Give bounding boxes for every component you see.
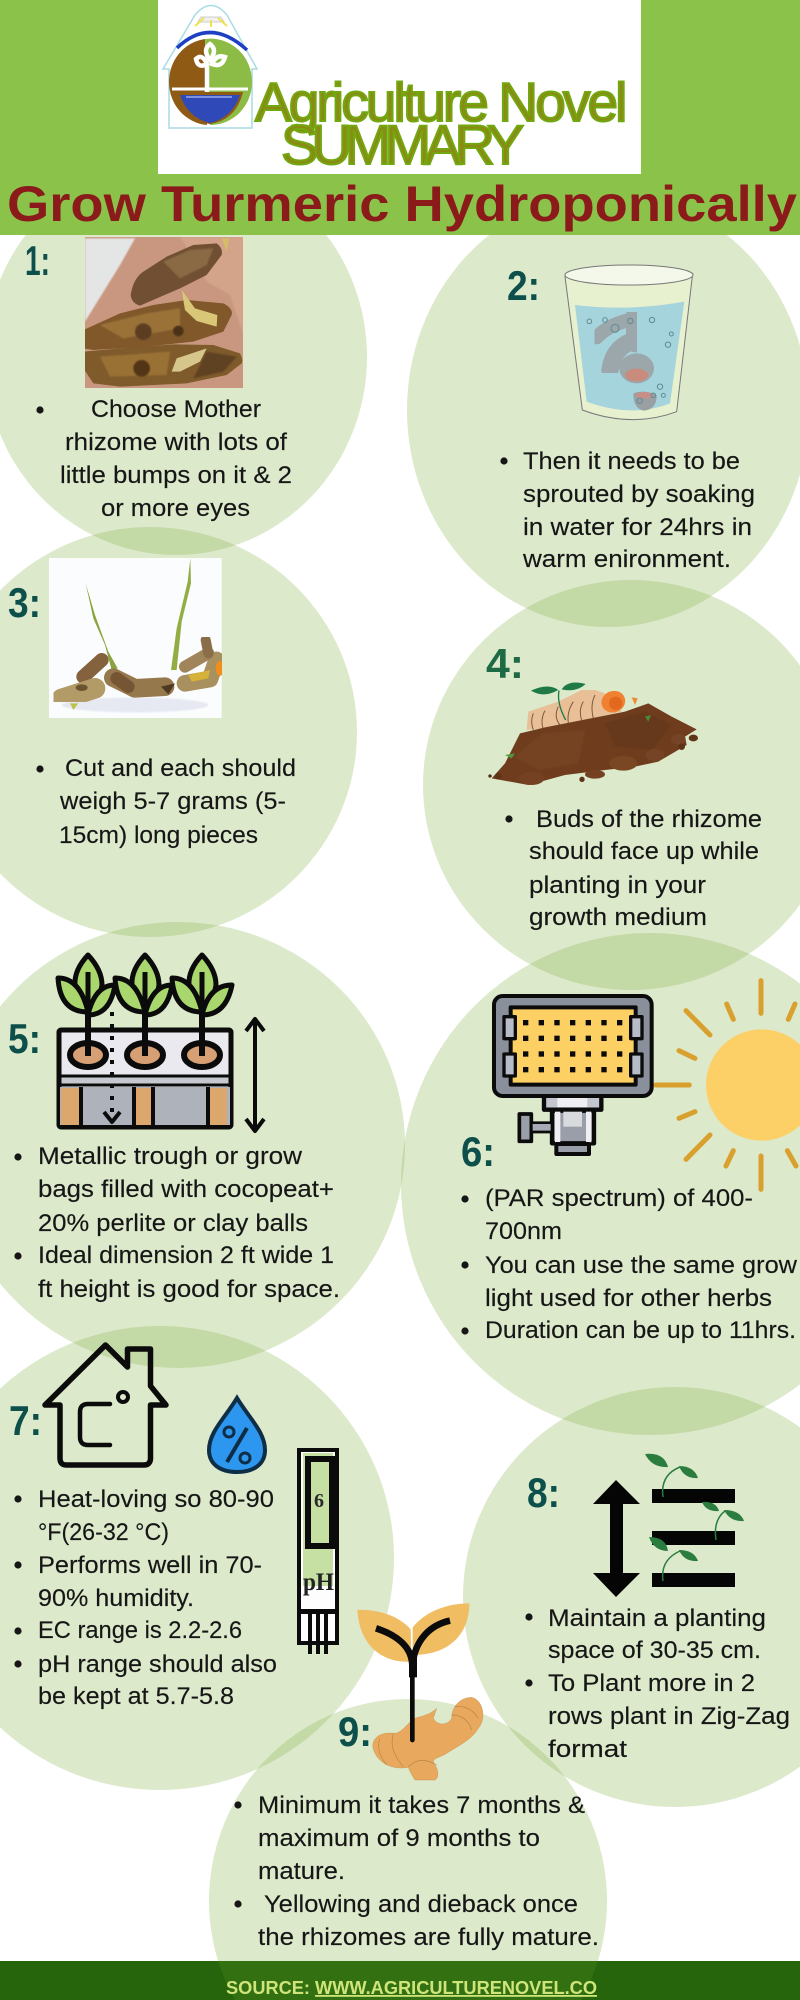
heading: 9: 9:: [338, 1708, 372, 1755]
text: step 5 instructions: bags filled with cocopeat+: [38, 1176, 334, 1203]
icon: pH test strip: 6: [314, 1490, 324, 1512]
text: step 2 instruction: sprouted by soaking: [523, 481, 755, 508]
icon: pH test strip: pH: [303, 1569, 335, 1596]
icon: LED grow light: [494, 996, 652, 1154]
text: step 2 instruction: warm enironment.: [522, 546, 731, 573]
text: step 7 instructions: be kept at 5.7-5.8: [38, 1683, 234, 1710]
text: step 8 instructions: To Plant more in 2: [548, 1670, 755, 1697]
text: step 5 instructions: 20% perlite or clay balls: [38, 1210, 308, 1237]
text: step 8 instructions: format: [548, 1736, 627, 1763]
icon: rhizome planted in soil: [488, 683, 698, 785]
icon: grow trough with three plants: [58, 955, 264, 1131]
text: step 3 instruction: weigh 5-7 grams (5-: [59, 788, 286, 815]
heading: 6: 6:: [461, 1128, 495, 1175]
text: step 3 instruction: Cut and each should: [65, 755, 296, 782]
panel: step 4: [423, 580, 800, 990]
text: step 5 instructions: ft height is good for space.: [38, 1276, 340, 1303]
logo panel: [158, 0, 641, 176]
text: step 1 instruction: rhizome with lots of: [65, 429, 287, 456]
heading: 2: 2:: [507, 262, 540, 309]
heading: 8: 8:: [527, 1469, 560, 1516]
panel: step 9: [209, 1603, 607, 1961]
text: step 7 instructions: EC range is 2.2-2.6: [38, 1617, 242, 1644]
title: Grow Turmeric Hydroponically: [7, 176, 797, 232]
heading: 4: 4:: [486, 640, 524, 687]
footer: source bar: SOURCE: WWW.AGRICULTURENOVEL.CO: [226, 1978, 597, 1998]
text: step 7 instructions: °F(26-32 °C): [38, 1519, 169, 1546]
icon: sun: [656, 981, 800, 1189]
text: step 8 instructions: space of 30-35 cm.: [548, 1637, 761, 1664]
text: step 9 instructions: Minimum it takes 7 months &: [258, 1792, 585, 1819]
text: step 7 instructions: [14, 1486, 277, 1710]
text: step 2 instruction: Then it needs to be: [523, 448, 740, 475]
text: step 1 instruction: or more eyes: [101, 495, 250, 522]
text: step 5 instructions: Metallic trough or grow: [38, 1143, 303, 1170]
text: step 9 instructions: Yellowing and dieback once: [264, 1891, 578, 1918]
text: step 1 instruction: little bumps on it & 2: [60, 462, 292, 489]
heading: 5: 5:: [8, 1015, 41, 1062]
text: step 9 instructions: mature.: [258, 1858, 345, 1885]
panel: step 1: [0, 235, 367, 555]
text: step 7 instructions: Heat-loving so 80-90: [38, 1486, 274, 1513]
text: step 4 instruction: [505, 806, 762, 931]
panel: step 5: [0, 922, 405, 1368]
icon: planting space arrow and rows: [593, 1454, 744, 1597]
icon: turmeric seedling: [357, 1603, 483, 1780]
icon: greenhouse logo: [163, 6, 257, 128]
text: step 8 instructions: Maintain a planting: [548, 1605, 766, 1632]
text: step 7 instructions: Performs well in 70-: [38, 1552, 262, 1579]
text: step 8 instructions: [525, 1605, 790, 1763]
panel: step 3: [0, 527, 357, 937]
text: step 6 instructions: Duration can be up to 11hrs.: [485, 1317, 796, 1344]
panel: step 2: [407, 193, 800, 627]
photo: sprouted turmeric pieces: [49, 558, 224, 718]
text: step 2 instruction: in water for 24hrs in: [523, 514, 752, 541]
text: step 6 instructions: light used for other herbs: [485, 1285, 772, 1312]
panel: step 6: [401, 933, 800, 1435]
text: step 6 instructions: [461, 1185, 798, 1344]
panel: step 7: [0, 1326, 394, 1790]
icon: pH test strip: [297, 1450, 338, 1654]
text: step 7 instructions: 90% humidity.: [38, 1585, 194, 1612]
heading: 7: 7:: [9, 1397, 42, 1444]
header: green banner: [0, 0, 800, 235]
text: step 3 instruction: 15cm) long pieces: [59, 822, 258, 849]
icon: house with temperature: [45, 1345, 166, 1465]
heading: 1: 1:: [25, 237, 50, 284]
text: step 4 instruction: should face up while: [529, 838, 759, 865]
text: step 8 instructions: rows plant in Zig-Zag: [548, 1703, 790, 1730]
logo text: [255, 71, 624, 176]
icon: humidity drop: [209, 1398, 265, 1472]
text: step 5 instructions: [14, 1143, 340, 1303]
text: step 1 instruction: Choose Mother: [91, 396, 261, 423]
text: step 6 instructions: You can use the same grow: [485, 1252, 798, 1279]
text: step 1 instruction: [36, 396, 292, 522]
text: step 6 instructions: 700nm: [485, 1218, 562, 1245]
text: step 2 instruction: [500, 448, 755, 573]
text: step 4 instruction: Buds of the rhizome: [536, 806, 762, 833]
text: step 4 instruction: growth medium: [529, 904, 707, 931]
text: step 3 instruction: [36, 755, 296, 849]
icon: rhizome soaking in glass of water: [565, 265, 693, 420]
panel: step 8: [463, 1387, 800, 1807]
text: step 7 instructions: pH range should also: [38, 1651, 277, 1678]
heading: 3: 3:: [8, 579, 41, 626]
text: step 5 instructions: Ideal dimension 2 ft wide 1: [38, 1242, 334, 1269]
text: step 9 instructions: the rhizomes are fully mature.: [258, 1924, 599, 1951]
text: step 9 instructions: maximum of 9 months to: [258, 1825, 540, 1852]
text: step 4 instruction: planting in your: [529, 872, 706, 899]
text: step 9 instructions: [234, 1792, 599, 1951]
text: step 6 instructions: (PAR spectrum) of 400-: [485, 1185, 753, 1212]
logo text: Agriculture Novel: [255, 71, 624, 133]
footer: source bar: [0, 1961, 800, 2000]
photo: mother rhizomes: [83, 237, 243, 388]
logo text: SUMMARY: [281, 113, 524, 176]
